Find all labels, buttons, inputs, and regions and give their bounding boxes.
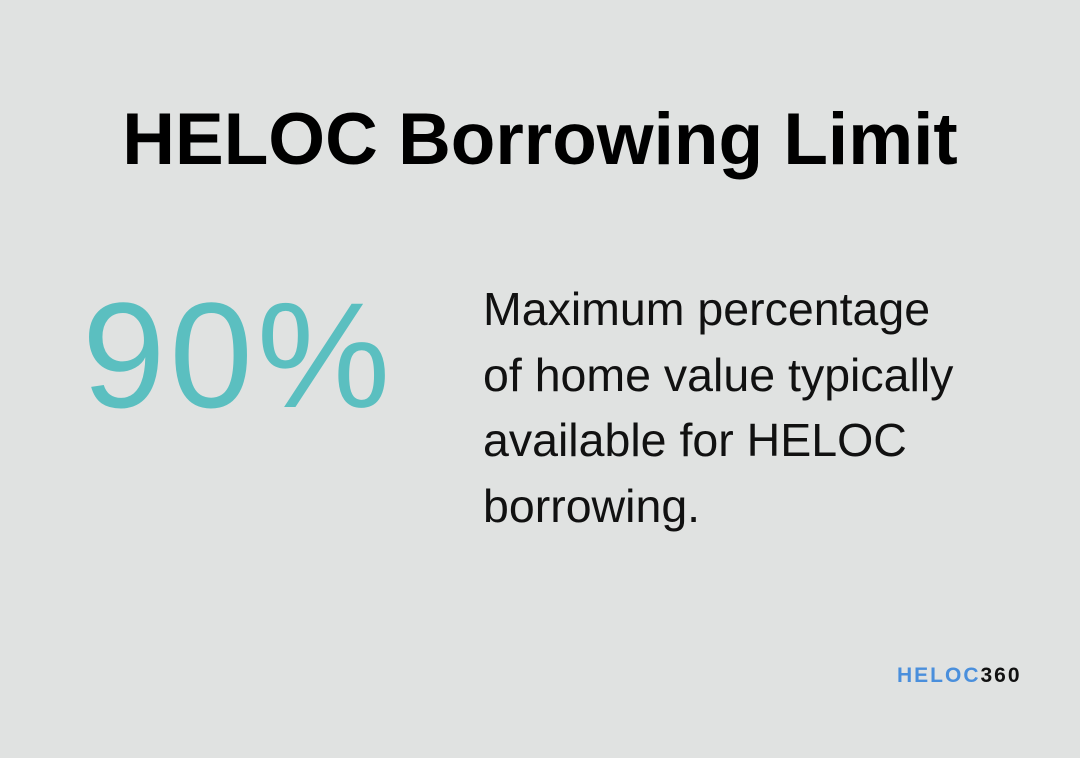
description: Maximum percentage bbox=[483, 283, 930, 335]
big stat: 90% bbox=[82, 271, 394, 439]
title: HELOC Borrowing Limit bbox=[122, 99, 958, 180]
description: available for HELOC bbox=[483, 414, 907, 466]
logo: HELOC360 bbox=[897, 664, 1022, 687]
description: borrowing. bbox=[483, 480, 700, 532]
description: of home value typically bbox=[483, 348, 953, 400]
description bbox=[483, 283, 954, 532]
